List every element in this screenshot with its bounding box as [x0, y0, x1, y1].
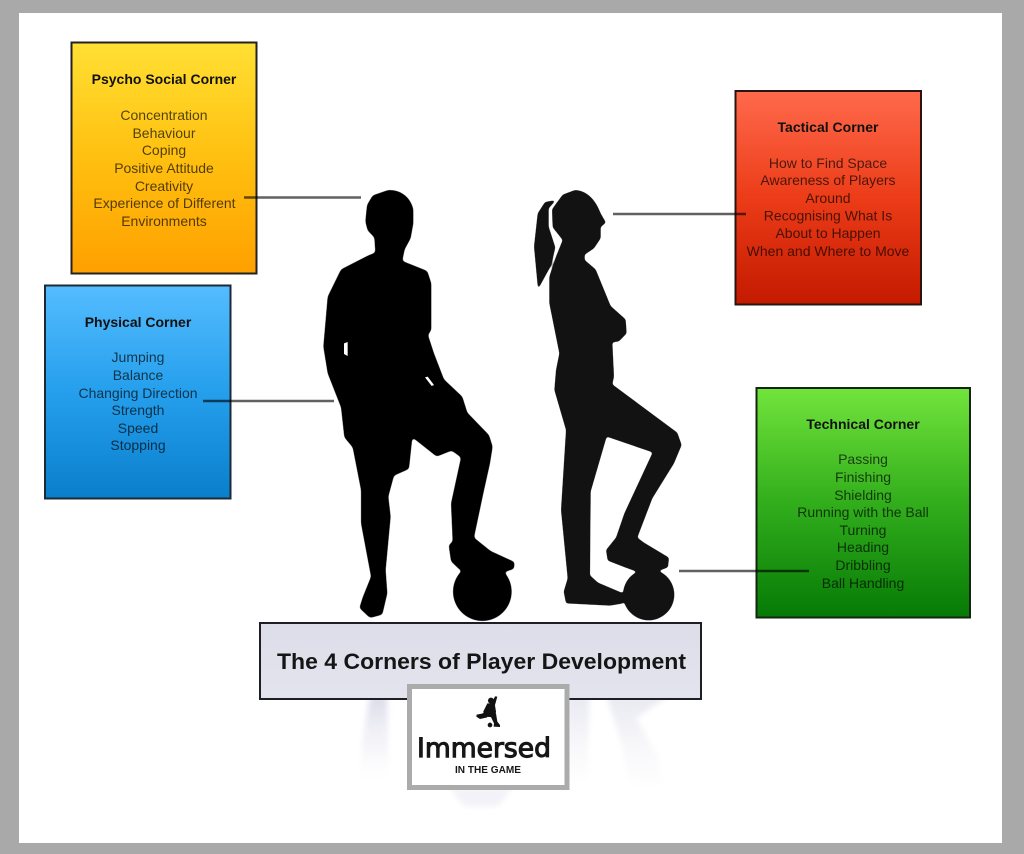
list: physical skills: Jumping	[112, 349, 164, 365]
list: technical skills: Turning	[840, 522, 886, 538]
connector: technical box to girl's ball	[679, 570, 809, 572]
girl's football	[623, 569, 674, 620]
list: psycho social skills: Coping	[142, 142, 186, 158]
player silhouette: girl with foot on ball	[534, 190, 682, 620]
list: psycho social skills: Behaviour	[132, 125, 196, 141]
boy's football	[453, 562, 512, 621]
list: technical skills	[797, 451, 929, 591]
list: tactical skills: Awareness of Players	[760, 172, 896, 188]
list: physical skills: Speed	[118, 420, 158, 436]
connector: physical box to boy's body	[203, 400, 334, 402]
list: technical skills: Shielding	[834, 487, 892, 503]
list: technical skills: Ball Handling	[822, 575, 904, 591]
list: tactical skills	[747, 155, 910, 259]
panel: physical corner	[45, 286, 230, 498]
list: physical skills: Changing Direction	[78, 385, 198, 401]
list: tactical skills: About to Happen	[775, 225, 881, 241]
list: tactical skills: When and Where to Move	[747, 243, 910, 259]
list: physical skills	[78, 349, 198, 453]
list: technical skills: Running with the Ball	[797, 504, 929, 520]
title banner	[260, 623, 701, 699]
list: psycho social skills: Environments	[121, 213, 207, 229]
player silhouette: boy with foot on ball	[323, 190, 515, 621]
panel: psycho social corner	[72, 42, 256, 274]
list: psycho social skills: Concentration	[120, 107, 208, 123]
list: psycho social skills: Positive Attitude	[114, 160, 214, 176]
icon: footballer kicking	[476, 696, 500, 727]
title: The 4 Corners of Player Development	[277, 649, 687, 674]
list: tactical skills: Around	[805, 190, 851, 206]
list: technical skills: Dribbling	[835, 557, 891, 573]
heading: technical corner: Technical Corner	[806, 416, 920, 432]
list: technical skills: Passing	[838, 451, 888, 467]
gaps at the boy's arms	[344, 342, 434, 386]
list: physical skills: Strength	[112, 402, 164, 418]
list: tactical skills: How to Find Space	[769, 155, 887, 171]
list: technical skills: Heading	[837, 539, 889, 555]
connector: psycho social box to boy's head	[244, 196, 361, 199]
list: technical skills: Finishing	[835, 469, 891, 485]
logo wordmark: Immersed	[417, 733, 551, 764]
list: psycho social skills: Creativity	[135, 178, 193, 194]
panel: tactical corner	[736, 91, 921, 304]
list: psycho social skills	[93, 107, 236, 229]
heading: physical corner: Physical Corner	[85, 314, 192, 330]
ponytail	[534, 200, 556, 289]
logo: immersed in the game	[410, 686, 567, 788]
faint reflection of the players below the title	[360, 696, 668, 806]
list: tactical skills: Recognising What Is	[764, 208, 892, 224]
connector: tactical box to girl's head	[613, 213, 746, 215]
panel: technical corner	[756, 388, 970, 618]
list: physical skills: Balance	[113, 367, 164, 383]
heading: psycho social corner: Psycho Social Corner	[92, 71, 237, 87]
logo tagline: IN THE GAME	[455, 765, 521, 776]
list: psycho social skills: Experience of Different	[93, 195, 236, 211]
list: physical skills: Stopping	[110, 437, 166, 453]
heading: tactical corner: Tactical Corner	[778, 119, 879, 135]
